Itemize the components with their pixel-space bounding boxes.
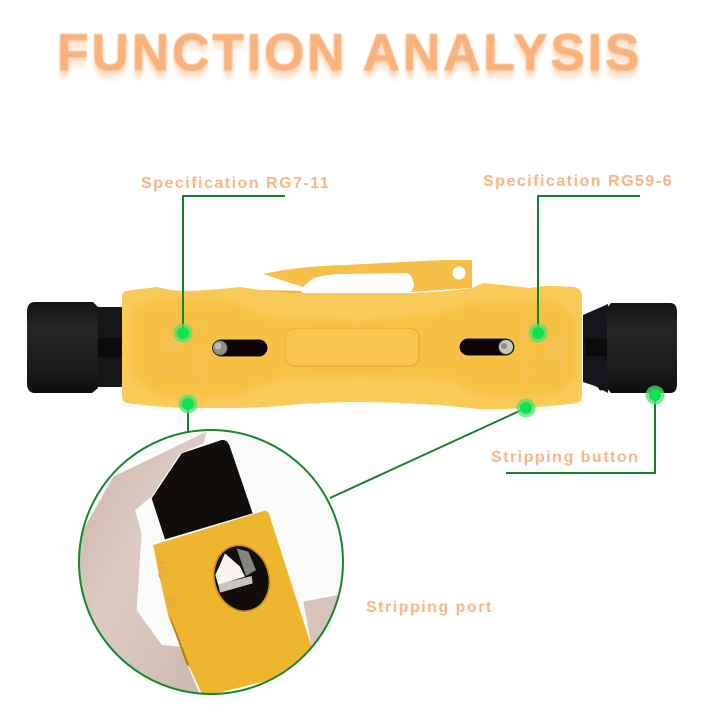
- product and callouts drawing: [27, 195, 677, 695]
- inset circle: stripping port close-up: [70, 430, 343, 703]
- label: stripping button: Stripping button: [491, 449, 639, 466]
- embossed marks left: RG7-11: [193, 315, 210, 379]
- hole interior: [215, 553, 245, 585]
- marker dot: [516, 398, 536, 418]
- icon: right black cap: [583, 303, 677, 393]
- label: specification RG7-11: Specification RG7-11: [141, 175, 330, 192]
- left slot with screw: [212, 339, 268, 357]
- slot on body edge: [169, 613, 190, 667]
- stripping hole: [213, 544, 270, 612]
- marker dot: [528, 324, 548, 342]
- right slot with screw: [459, 338, 515, 356]
- callout line: specification RG7-11: [183, 196, 285, 333]
- label: stripping port: Stripping port: [366, 599, 493, 616]
- tool body: [122, 283, 582, 409]
- marker dot: [174, 324, 192, 342]
- marker dot: [646, 386, 664, 404]
- yellow body: [153, 511, 312, 697]
- embossed marks left: [161, 315, 210, 379]
- title: FUNCTION ANALYSIS: [57, 24, 642, 82]
- callout line: stripping button: [506, 395, 655, 473]
- center window: [285, 328, 420, 367]
- marker dot: [178, 394, 198, 414]
- embossed text: RG: [154, 561, 170, 580]
- icon: pocket clip: [262, 260, 472, 294]
- blade: [218, 576, 253, 593]
- black cap: [152, 440, 253, 539]
- embossed text: [158, 562, 176, 608]
- hand: [70, 432, 338, 703]
- icon: left black cap: [27, 302, 123, 393]
- embossed marks right: RG59-6: [517, 315, 534, 380]
- callout line: specification RG59-6: [538, 196, 640, 333]
- callout line: inset right: [330, 408, 526, 498]
- embossed marks right: [517, 315, 566, 380]
- darker facet of body: [132, 299, 575, 397]
- embossed text: 59: [164, 594, 179, 609]
- label: specification RG59-6: Specification RG59-6: [483, 173, 673, 190]
- callout line: inset left: [187, 404, 189, 432]
